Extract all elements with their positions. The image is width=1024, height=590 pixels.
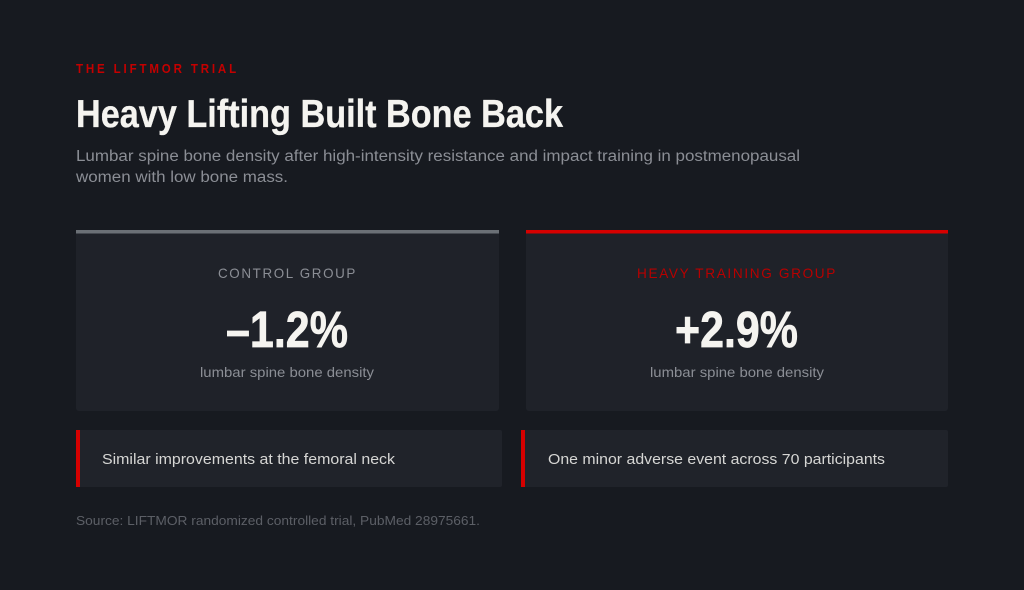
callout: femoral neck — [76, 430, 502, 487]
control group label: CONTROL GROUP — [218, 265, 357, 281]
callout: adverse events — [521, 430, 948, 487]
callout text: One minor adverse event across 70 participants — [548, 452, 885, 468]
callout accent bar — [76, 430, 80, 487]
heavy training label: HEAVY TRAINING GROUP — [637, 265, 837, 281]
heavy training caption: lumbar spine bone density — [650, 364, 824, 380]
control group top rule — [76, 230, 499, 234]
title: Heavy Lifting Built Bone Back — [76, 93, 563, 136]
eyebrow: trial name: THE LIFTMOR TRIAL — [76, 61, 239, 76]
callout text: Similar improvements at the femoral neck — [102, 452, 396, 468]
panel: control group — [76, 230, 499, 411]
heavy training value: +2.9% — [675, 301, 798, 358]
callout accent bar — [521, 430, 525, 487]
control group value: –1.2% — [226, 301, 348, 358]
subtitle — [75, 148, 800, 186]
control group caption: lumbar spine bone density — [200, 364, 374, 380]
subtitle: women with low bone mass. — [75, 169, 288, 186]
source note: Source: LIFTMOR randomized controlled trial, PubMed 28975661. — [76, 513, 480, 528]
heavy training top rule — [526, 230, 948, 234]
subtitle: Lumbar spine bone density after high-intensity resistance and impact training in postmenopausal — [76, 148, 800, 165]
panel: heavy training group — [526, 230, 948, 411]
